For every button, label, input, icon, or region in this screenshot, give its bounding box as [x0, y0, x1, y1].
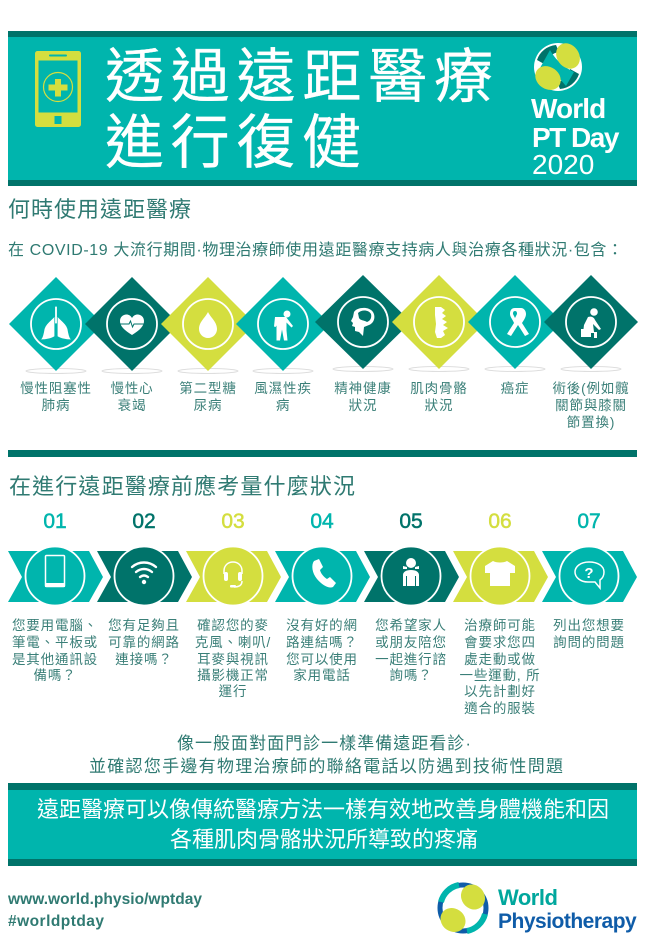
footer links: #worldptday: [8, 913, 104, 930]
step 07 question bubble: ?: [584, 565, 594, 582]
diamond: rheumatic disease: 病: [276, 398, 290, 413]
step 03 headset: 攝影機正常: [197, 667, 269, 683]
step 06 t-shirt: 以先計劃好: [464, 684, 536, 699]
intro text: 在 COVID-19 大流行期間·物理治療師使用遠距醫療支持病人與治療各種狀況·包含：: [8, 240, 623, 259]
step 04 phone: 您可以使用: [286, 651, 358, 667]
divider bar: [8, 450, 637, 457]
step 06 t-shirt: 處走動或做: [464, 652, 536, 667]
step 06 t-shirt: 會要求您四: [464, 634, 536, 650]
diamond: heart failure: [85, 277, 179, 413]
step 01 tablet: 是其他通訊設: [12, 652, 98, 667]
step 06 t-shirt: [453, 510, 548, 716]
step 04 phone: 家用電話: [293, 667, 351, 683]
heading: when to use telehealth: 何時使用遠距醫療: [8, 197, 191, 222]
diamond: musculoskeletal: [392, 275, 486, 413]
diamond: mental health: 精神健康: [334, 380, 392, 396]
step 05 person: 或朋友陪您: [375, 634, 447, 650]
diamond: cancer: [468, 275, 562, 396]
step 03 headset: [186, 510, 281, 699]
diamond: heart failure: 衰竭: [118, 397, 146, 413]
step 06 t-shirt: 適合的服裝: [464, 700, 536, 716]
heading: what to consider: 在進行遠距醫療前應考量什麼狀況: [9, 474, 355, 499]
header banner: [8, 31, 637, 186]
step 06 t-shirt: 治療師可能: [464, 617, 536, 633]
steps row: [8, 510, 637, 716]
diamond: rheumatic disease: [236, 277, 330, 413]
logo: World PT Day 2020: PT Day: [532, 122, 620, 153]
preparation advice text: 像一般面對面門診一樣準備遠距看診·: [177, 734, 471, 753]
step 07 question bubble: 詢問的問題: [553, 635, 625, 650]
step 04 phone: 04: [310, 510, 334, 533]
step 02 wifi: 可靠的網路: [108, 635, 180, 650]
footer links: [7, 891, 202, 930]
step 05 person: 05: [399, 510, 423, 533]
diamond: post surgery: 術後(例如髖: [552, 381, 630, 396]
step 02 wifi: [97, 510, 192, 667]
diamond: post surgery: [544, 275, 638, 430]
step 07 question bubble: [542, 510, 637, 650]
logo: World PT Day 2020: 2020: [532, 149, 594, 180]
diamond: COPD: [9, 277, 103, 413]
step 01 tablet: [8, 510, 103, 683]
logo: World PT Day 2020: World: [531, 93, 605, 124]
step 05 person: [364, 510, 459, 683]
diamond: cancer: 癌症: [501, 381, 529, 396]
step 04 phone: 路連結嗎？: [286, 635, 358, 650]
step 07 question bubble: 07: [577, 510, 601, 533]
step 05 person: 您希望家人: [375, 617, 447, 633]
diamond: post surgery: 節置換): [567, 415, 615, 430]
step 01 tablet: 備嗎？: [33, 668, 77, 683]
diamond: COPD: 慢性阻塞性: [20, 380, 92, 396]
step 02 wifi: 02: [132, 510, 156, 533]
diamond: COPD: 肺病: [42, 398, 70, 413]
logo: World Physiotherapy: World: [498, 885, 557, 910]
preparation advice text: 並確認您手邊有物理治療師的聯絡電話以防遇到技術性問題: [89, 757, 563, 776]
step 02 wifi: 您有足夠且: [108, 617, 180, 633]
diamond: mental health: 狀況: [349, 398, 377, 413]
step 03 headset: 03: [221, 510, 245, 533]
diamond: mental health: [315, 275, 411, 413]
diamond: type 2 diabetes: [161, 277, 255, 413]
diamond: type 2 diabetes: 尿病: [194, 398, 222, 413]
preparation advice text: [89, 734, 563, 776]
logo: World PT Day 2020: [531, 39, 620, 180]
step 07 question bubble: 列出您想要: [553, 617, 625, 633]
step 01 tablet: 01: [43, 510, 67, 533]
footer links: www.world.physio/wptday: [7, 891, 202, 908]
diamond conditions row: [9, 275, 638, 430]
diamond: musculoskeletal: 狀況: [425, 398, 453, 413]
key message banner: 各種肌肉骨骼狀況所導致的疼痛: [170, 827, 478, 852]
key message banner: 遠距醫療可以像傳統醫療方法一樣有效地改善身體機能和因: [37, 797, 609, 822]
step 03 headset: 克風、喇叭/: [195, 635, 271, 650]
step 02 wifi: 連接嗎？: [115, 651, 173, 667]
step 03 headset: 運行: [219, 684, 247, 699]
icon: phone with medical cross: [35, 51, 81, 127]
logo: World Physiotherapy: Physiotherapy: [498, 910, 637, 933]
step 06 t-shirt: 一些運動, 所: [460, 668, 540, 683]
diamond: post surgery: 關節與膝關: [555, 398, 627, 413]
title: [105, 44, 493, 176]
title: 進行復健: [105, 110, 361, 176]
step 01 tablet: 筆電、平板或: [12, 635, 98, 650]
step 04 phone: [275, 510, 370, 683]
diamond: rheumatic disease: 風濕性疾: [254, 381, 312, 396]
title: 透過遠距醫療: [105, 44, 493, 110]
key message banner: [8, 783, 637, 866]
diamond: type 2 diabetes: 第二型糖: [179, 380, 237, 396]
step 03 headset: 確認您的麥: [197, 617, 269, 633]
step 06 t-shirt: 06: [488, 510, 512, 533]
step 01 tablet: 您要用電腦、: [12, 617, 98, 633]
step 03 headset: 耳麥與視訊: [197, 652, 269, 667]
diamond: heart failure: 慢性心: [110, 381, 154, 396]
diamond: musculoskeletal: 肌肉骨骼: [410, 381, 468, 396]
step 04 phone: 沒有好的網: [286, 617, 358, 633]
step 05 person: 一起進行諮: [375, 652, 447, 667]
logo: World Physiotherapy: [436, 880, 637, 937]
step 05 person: 詢嗎？: [389, 668, 433, 683]
